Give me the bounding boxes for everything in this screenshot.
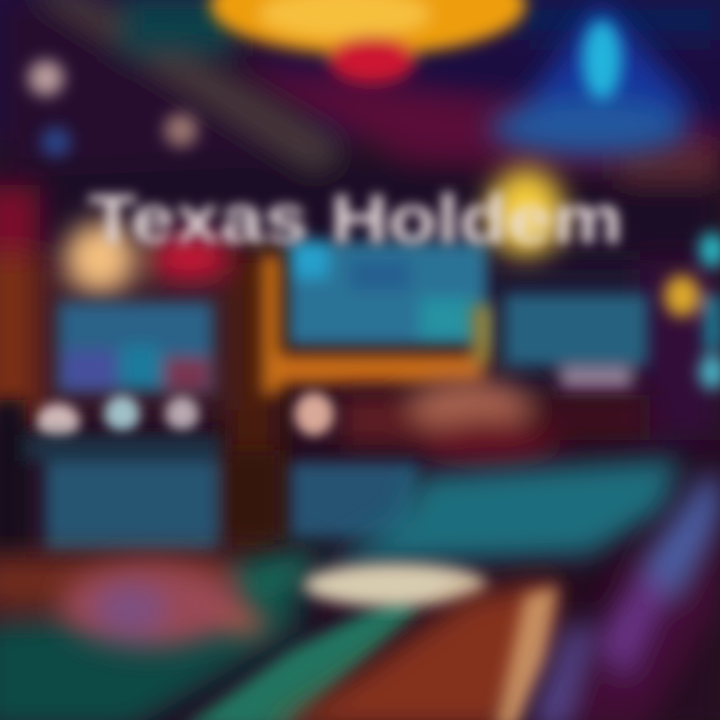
rail highlight <box>495 585 558 720</box>
blue cone lamp <box>490 0 700 156</box>
wall <box>0 185 720 550</box>
poker chips <box>60 563 267 647</box>
purple foreground chair <box>530 470 720 720</box>
cone highlight <box>582 20 622 100</box>
wooden rail <box>270 580 555 720</box>
cream stripe <box>303 563 487 607</box>
ceiling <box>0 0 720 260</box>
blue cabinet: centre <box>290 462 418 538</box>
teal table <box>320 458 680 565</box>
side lights <box>664 232 720 390</box>
machine lights <box>36 392 334 441</box>
orange ledge <box>262 255 492 395</box>
green floor stripe <box>180 595 420 720</box>
wall lamps <box>64 222 232 294</box>
ceiling lights <box>28 60 198 157</box>
screen: centre <box>288 240 488 346</box>
floor <box>0 545 320 720</box>
screen: right <box>504 294 648 392</box>
title glow <box>488 168 564 256</box>
seating <box>340 379 650 471</box>
title: Texas Holdem <box>88 180 623 258</box>
yellow ceiling lamp <box>210 0 526 84</box>
screen: left <box>58 302 213 392</box>
blue cabinet: left <box>0 400 280 560</box>
